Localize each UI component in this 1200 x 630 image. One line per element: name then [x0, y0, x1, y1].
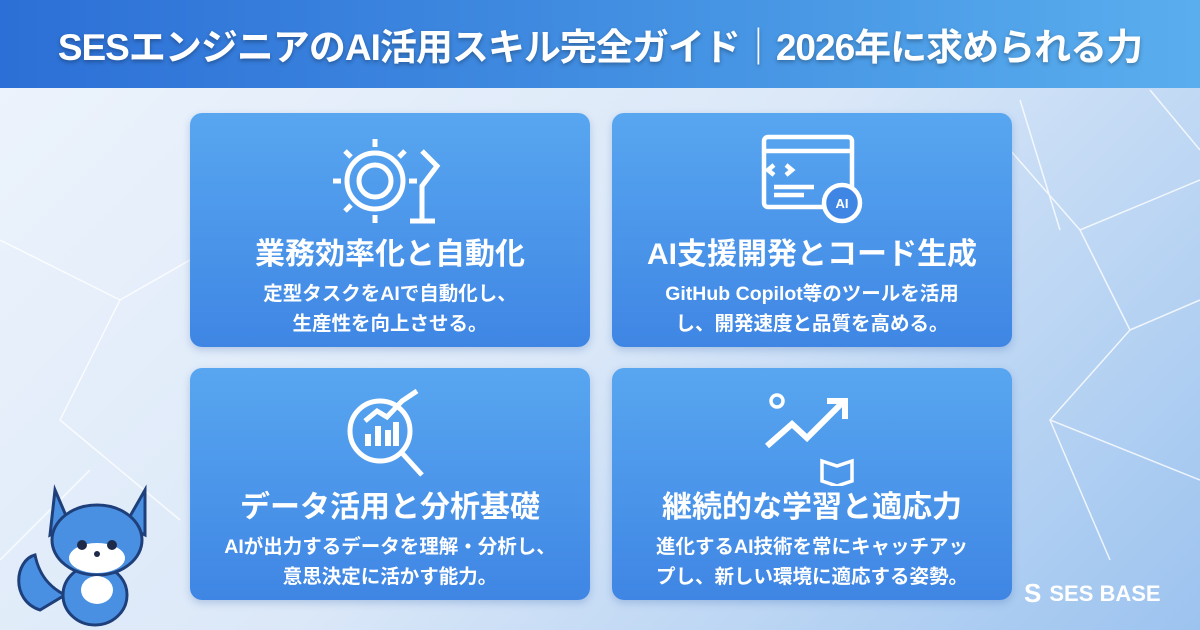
icon: gear brain robot arm	[333, 139, 440, 224]
icon: code window AI	[762, 134, 862, 224]
heading: 継続的な学習と適応力	[662, 491, 962, 524]
panel: data	[190, 368, 590, 600]
text	[665, 283, 959, 335]
logo: SES BASE	[1049, 580, 1161, 606]
heading: AI支援開発とコード生成	[647, 238, 977, 271]
icon: magnifier chart	[348, 388, 424, 477]
text: GitHub Copilot等のツールを活用	[665, 283, 959, 305]
text: プし、新しい環境に適応する姿勢。	[656, 566, 968, 588]
panel: efficiency	[190, 113, 590, 347]
logo: S	[1024, 578, 1041, 608]
text: 定型タスクをAIで自動化し、	[263, 283, 517, 305]
heading: データ活用と分析基礎	[240, 491, 540, 524]
text: し、開発速度と品質を高める。	[675, 313, 948, 335]
text: 進化するAI技術を常にキャッチアッ	[656, 536, 968, 558]
icon: code window AI: AI	[836, 196, 848, 211]
title: SESエンジニアのAI活用スキル完全ガイド｜2026年に求められる力	[58, 27, 1142, 68]
logo	[1024, 578, 1161, 608]
text: 意思決定に活かす能力。	[283, 566, 497, 588]
mascot: fox	[17, 484, 146, 626]
text: AIが出力するデータを理解・分析し、	[224, 536, 556, 558]
text	[224, 536, 556, 588]
text: 生産性を向上させる。	[292, 313, 488, 335]
text	[656, 536, 968, 588]
icon: arrow book bulb	[765, 393, 854, 486]
title	[0, 0, 1200, 88]
text	[263, 283, 517, 335]
panel: learning	[612, 368, 1012, 600]
panel: ai dev	[612, 113, 1012, 347]
heading: 業務効率化と自動化	[255, 238, 525, 271]
